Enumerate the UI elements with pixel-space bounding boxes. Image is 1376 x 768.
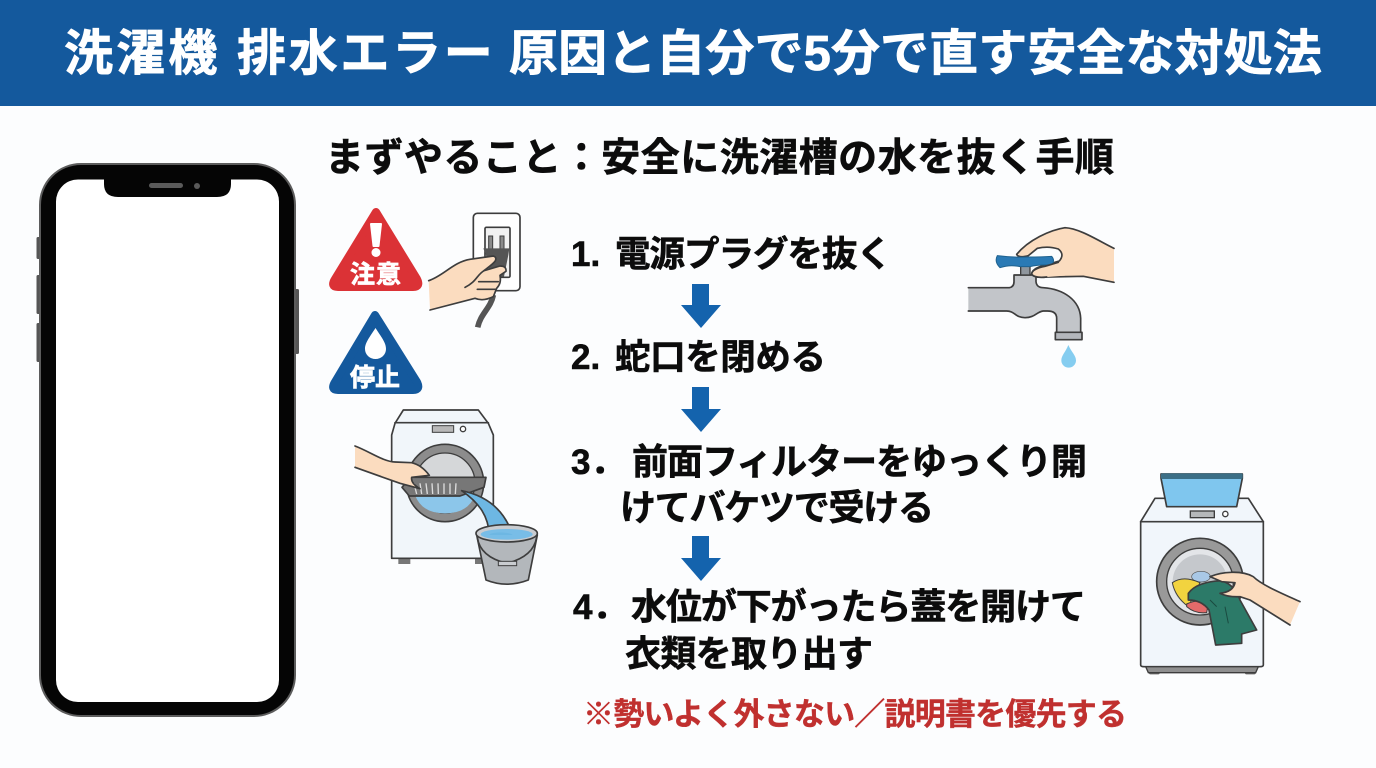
icon: front filter draining water into bucket <box>355 410 537 584</box>
icon: red caution triangle: 注意 <box>350 261 401 289</box>
header band with title: 洗濯機 <box>64 27 221 81</box>
step 2 text: 蛇口を閉める <box>615 337 826 377</box>
arrow 1 to 2 <box>681 284 721 328</box>
step 4 text <box>573 586 1086 674</box>
icon: blue water-stop triangle: 停止 <box>350 364 400 392</box>
icon: hand pulling plug from outlet <box>429 213 520 327</box>
arrow 2 to 3 <box>681 387 721 432</box>
step 3 text: 3． <box>571 443 625 482</box>
step 4 text: 4． <box>573 588 627 627</box>
step 3 text: 前面フィルターをゆっくり開 <box>632 441 1087 482</box>
header band with title: 原因と自分で5分で直す安全な対処法 <box>509 27 1322 81</box>
section heading: まずやること：安全に洗濯槽の水を抜く手順 <box>325 137 1114 180</box>
icon: blue water-stop triangle <box>333 315 418 392</box>
icon: hand closing faucet <box>968 228 1114 368</box>
step 4 text: 水位が下がったら蓋を開けて <box>631 586 1086 627</box>
warning note: ※勢いよく外さない／説明書を優先する <box>583 697 1127 732</box>
step 1 text: 1. <box>571 235 600 274</box>
smartphone mockup <box>36 164 299 716</box>
arrow 3 to 4 <box>681 536 721 581</box>
header band with title: 排水エラー <box>237 27 496 81</box>
header band with title <box>0 0 1376 106</box>
icon: red caution triangle <box>333 212 418 289</box>
step 2 text: 2. <box>571 338 600 377</box>
step 3 text <box>571 441 1087 528</box>
step 1 text: 電源プラグを抜く <box>615 234 892 274</box>
icon: taking laundry out of washer <box>1141 473 1300 674</box>
step 4 text: 衣類を取り出す <box>625 633 873 674</box>
step 3 text: けてバケツで受ける <box>620 487 934 528</box>
